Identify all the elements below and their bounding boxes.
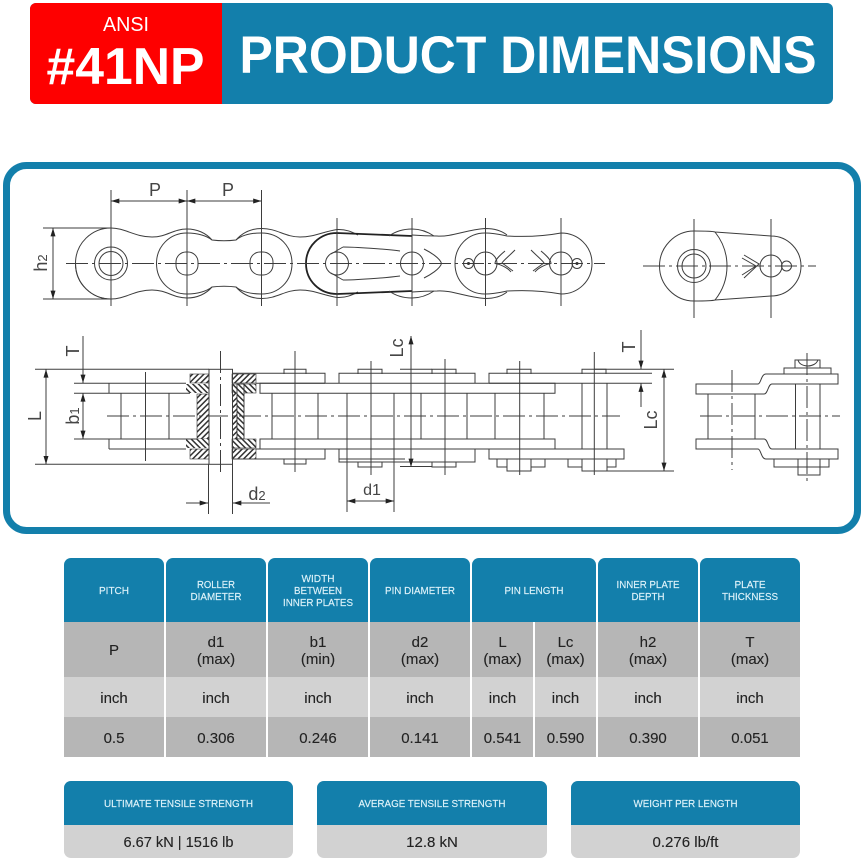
dimension: Lc left [387,336,432,467]
column: plate thickness: T [745,634,755,651]
column: roller diameter: 0.306 [197,730,235,747]
column: width between inner plates: b1 [310,634,326,651]
card: weight per length: WEIGHT PER LENGTH [634,798,738,810]
column: pin length: Lc [558,634,574,651]
column: pin length: 0.590 [547,730,584,747]
dimension: T and b1: T [63,346,83,356]
column: pin length: L [498,634,507,651]
column: pitch: P [109,642,119,659]
hatched cross-section [186,369,256,464]
column: width between inner plates [283,573,353,747]
column: pin length: inch [489,690,516,707]
column: pin diameter: 0.141 [401,730,439,747]
dimension: T and b1: b1 [63,407,83,425]
red model badge [30,3,222,104]
column: inner plate depth: (max) [629,651,667,668]
card: average tensile strength: AVERAGE TENSILE STRENGTH [358,798,506,810]
column: roller diameter: (max) [197,651,235,668]
card: ultimate tensile strength [64,781,293,858]
column: inner plate depth: h2 [640,634,656,651]
card: weight per length: 0.276 lb/ft [653,834,719,851]
column: plate thickness: (max) [731,651,769,668]
column: pin length: inch [552,690,579,707]
column: pin length [483,585,585,747]
column: pin diameter [385,585,455,747]
dimension: pitch P: P [222,180,234,200]
column: roller diameter [190,579,242,747]
red model badge: ANSI [103,14,149,36]
card: ultimate tensile strength: ULTIMATE TENSILE STRENGTH [104,798,253,810]
column: plate thickness [722,579,778,747]
drawing: chain top view with cross-section [25,330,674,514]
column: inner plate depth: INNER PLATE [616,579,680,591]
dimension: Lc right [600,369,674,471]
column: pitch [99,585,129,747]
column: pin diameter: (max) [401,651,439,668]
dimension: L [25,369,209,464]
dimension: L: L [25,411,45,421]
card: average tensile strength [317,781,547,858]
panel frame [6,166,858,530]
column: roller diameter: DIAMETER [190,591,242,603]
dimension: Lc left: Lc [387,338,407,358]
column: roller diameter: ROLLER [197,579,235,591]
card: weight per length [571,781,800,858]
column: pin length: PIN LENGTH [504,585,564,597]
column: width between inner plates: inch [304,690,332,707]
dimension: pitch P: P [149,180,161,200]
card: ultimate tensile strength: 6.67 kN | 1516 lb [124,834,234,851]
column: roller diameter: inch [202,690,230,707]
drawing: chain side view [31,180,605,306]
title banner [30,3,833,104]
column: inner plate depth [616,579,680,747]
drawing: chain end view bottom [696,353,840,482]
column: width between inner plates: BETWEEN [294,585,342,597]
dimension: Lc right: Lc [641,410,661,430]
heading: product dimensions: PRODUCT DIMENSIONS [240,26,816,85]
column: plate thickness: PLATE [734,579,766,591]
column: plate thickness: 0.051 [731,730,769,747]
dimension: T right [594,330,674,407]
dimension: d2: d2 [248,484,266,504]
column: pin diameter: PIN DIAMETER [385,585,455,597]
column: inner plate depth: 0.390 [629,730,667,747]
column: width between inner plates: (min) [301,651,335,668]
card: average tensile strength: 12.8 kN [406,834,458,851]
dimension: d2 [186,464,270,514]
dimension: h2: h2 [31,254,51,272]
table row backgrounds [64,558,800,757]
dimension: T right: T [619,342,639,352]
column: pitch: PITCH [99,585,129,597]
column: width between inner plates: WIDTH [302,573,334,585]
column: inner plate depth: inch [634,690,662,707]
column: plate thickness: inch [736,690,764,707]
banner blue background [30,3,833,104]
column: roller diameter: d1 [208,634,224,651]
column: pitch: inch [100,690,128,707]
column: pin diameter: d2 [412,634,428,651]
dimension: d1: d1 [363,482,381,499]
column: width between inner plates: 0.246 [299,730,337,747]
column: inner plate depth: DEPTH [632,591,664,603]
column: pin length: (max) [483,651,522,668]
dimension: pitch P [111,180,262,201]
column: pin length: (max) [546,651,585,668]
dimension: d1 [347,439,394,512]
red model badge: #41NP [46,38,204,96]
column: width between inner plates: INNER PLATES [283,597,353,609]
column: pin diameter: inch [406,690,434,707]
column: pitch: 0.5 [104,730,124,747]
panel: chain technical drawing [6,166,858,530]
dimension: T and b1 [63,336,83,439]
drawing: chain end view top [643,219,816,318]
column: pin length: 0.541 [484,730,521,747]
dimension: h2 [31,228,111,299]
dimensions table [64,558,800,757]
column: plate thickness: THICKNESS [722,591,778,603]
